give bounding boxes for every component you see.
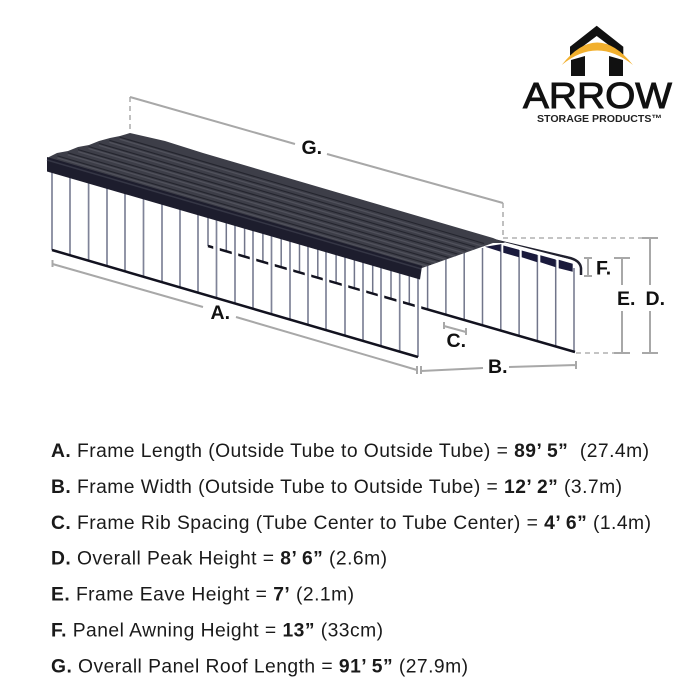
dimension B: B. <box>488 356 508 378</box>
icon: yellow arc <box>562 42 633 65</box>
awning panels <box>485 244 573 272</box>
dimension F <box>584 258 611 280</box>
front wall base rail <box>52 250 418 357</box>
logo tagline: STORAGE PRODUCTS™ <box>537 113 662 125</box>
spec E: E. Frame Eave Height = 7’ (2.1m) <box>51 584 354 606</box>
spec G: G. Overall Panel Roof Length = 91’ 5” (27.9m) <box>51 656 468 678</box>
dimension G <box>130 97 503 238</box>
front wall posts <box>52 165 418 357</box>
spec D: D. Overall Peak Height = 8’ 6” (2.6m) <box>51 548 387 570</box>
dimension G: G. <box>302 137 322 159</box>
back wall base rail <box>208 246 575 352</box>
spec A: A. Frame Length (Outside Tube to Outside Tube) = 89’ 5” (27.4m) <box>51 441 649 462</box>
back wall posts <box>208 214 574 352</box>
roof ribs <box>57 137 484 268</box>
specification list <box>51 441 651 678</box>
icon: right house wall <box>609 56 623 76</box>
dimension E: E. <box>617 288 635 310</box>
dimension A <box>52 260 417 374</box>
dimension D: D. <box>646 288 665 310</box>
dimension B <box>421 356 576 378</box>
dimension C <box>444 322 466 352</box>
spec C: C. Frame Rib Spacing (Tube Center to Tube Center) = 4’ 6” (1.4m) <box>51 513 651 534</box>
dimension E <box>576 258 635 353</box>
post halos <box>216 240 418 357</box>
dimension D <box>503 238 665 353</box>
logo: Arrow Storage Products <box>523 26 672 125</box>
roof panel <box>47 133 505 280</box>
carport diagram <box>47 133 581 357</box>
dimension F: F. <box>596 258 611 280</box>
roof fascia <box>47 157 422 280</box>
icon: house roof chevron <box>570 26 623 56</box>
gable end trim <box>493 240 581 275</box>
dimension A: A. <box>210 302 230 324</box>
icon: left house wall <box>571 56 585 76</box>
roof surface <box>47 133 505 268</box>
spec B: B. Frame Width (Outside Tube to Outside Tube) = 12’ 2” (3.7m) <box>51 477 622 498</box>
dimension C: C. <box>446 330 466 352</box>
logo wordmark: ARROW <box>523 75 672 116</box>
spec F: F. Panel Awning Height = 13” (33cm) <box>51 620 383 642</box>
